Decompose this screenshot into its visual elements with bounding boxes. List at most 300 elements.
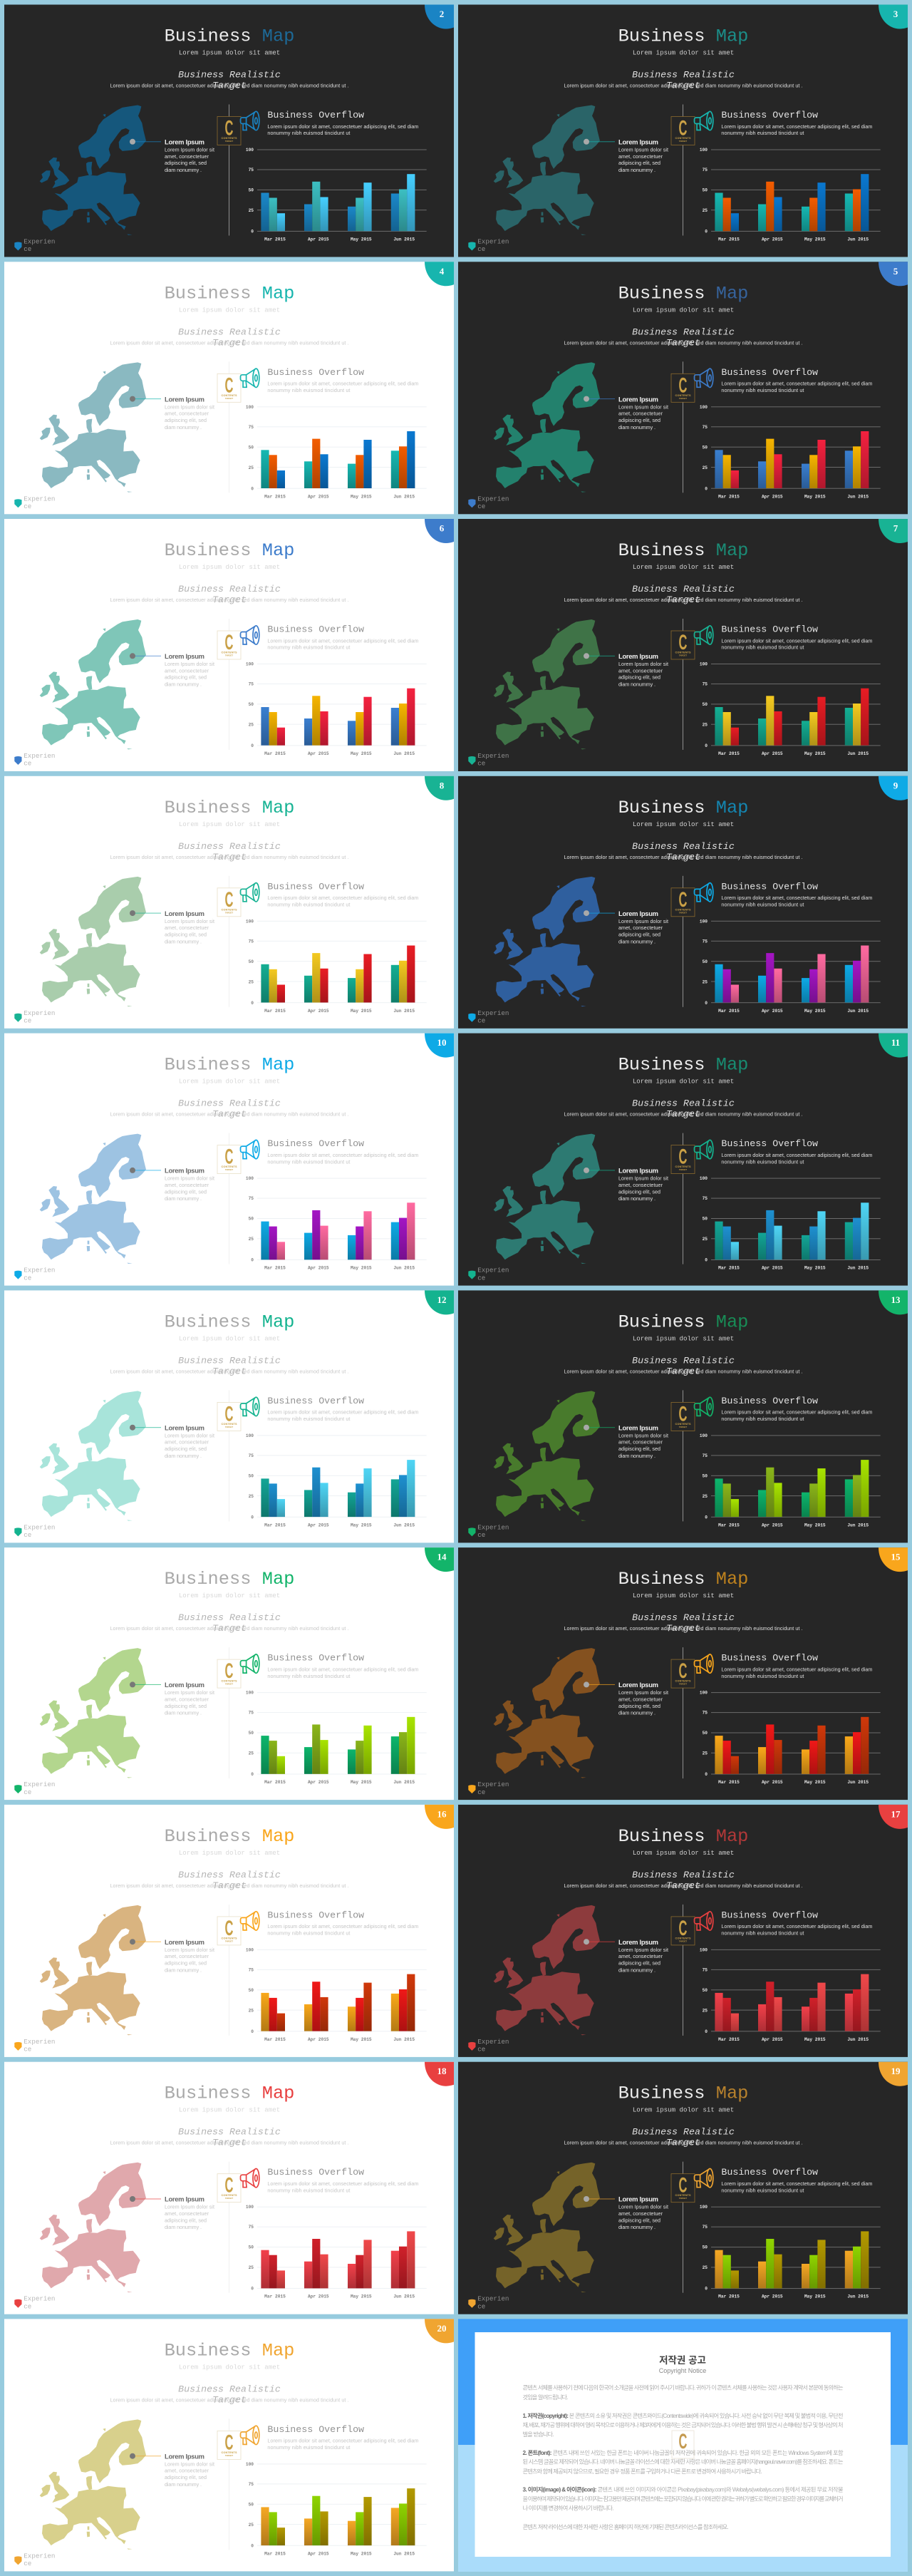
bar chart: 25	[249, 2008, 254, 2013]
map callout: adipiscing elit, sed	[165, 417, 207, 423]
chart heading: nonummy nibh euismod tincidunt ut	[267, 387, 350, 393]
chart heading: Lorem ipsum dolor sit amet, consectetuer adipiscing elit, sed diam	[267, 2180, 418, 2187]
bar chart: May 2015	[804, 494, 826, 499]
footer logo	[14, 2552, 55, 2567]
bar chart: Jun 2015	[393, 1009, 415, 1014]
bar chart	[246, 2462, 427, 2556]
bar chart: 0	[251, 1001, 254, 1006]
title: Business Map	[165, 2083, 294, 2104]
chart heading: nonummy nibh euismod tincidunt ut	[721, 1416, 804, 1422]
section heading: Business Realistic	[632, 70, 735, 80]
bar chart: Jun 2015	[847, 237, 869, 242]
logo badge: CONTENTS	[221, 394, 237, 397]
section heading: Business Realistic	[178, 2127, 281, 2138]
chart heading: Lorem ipsum dolor sit amet, consectetuer adipiscing elit, sed diam	[267, 2438, 418, 2444]
bar chart: Apr 2015	[308, 1266, 329, 1271]
title: Business Map	[165, 1826, 294, 1847]
chart heading: nonummy nibh euismod tincidunt ut	[721, 2187, 804, 2193]
bar chart: 0	[705, 743, 708, 748]
description: Lorem ipsum dolor sit amet, consectetuer adipiscing elit, sed diam nonummy nibh euismod tincidunt ut .	[110, 854, 349, 860]
section heading: Business Realistic	[632, 326, 735, 337]
footer logo	[14, 238, 55, 253]
europe map	[40, 877, 146, 1006]
section heading	[178, 1355, 281, 1376]
logo badge: CONTENTS	[221, 908, 237, 911]
logo badge	[671, 1145, 695, 1174]
bar chart: 50	[249, 2502, 254, 2507]
bar chart: 25	[703, 979, 708, 984]
footer logo: Experien	[477, 1523, 509, 1531]
page number badge	[425, 1805, 454, 1829]
page number badge	[879, 1547, 908, 1572]
subtitle: Lorem ipsum dolor sit amet	[179, 1078, 280, 1086]
bar chart: Apr 2015	[762, 1009, 783, 1014]
map callout	[584, 1681, 668, 1716]
chart heading: Business Overflow	[721, 881, 818, 892]
notice body text: 나 이미지를 변경하여 사용하시기 바랍니다.	[523, 2505, 614, 2512]
map callout: diam nonummy .	[165, 1967, 202, 1973]
logo badge: CONTENTS	[221, 1680, 237, 1683]
map callout: amet, consectetuer	[165, 1182, 209, 1188]
chart heading: Business Overflow	[267, 2424, 364, 2435]
footer logo: Experien	[24, 1523, 55, 1531]
map callout: Lorem Ipsum	[618, 1681, 658, 1689]
bar chart: May 2015	[804, 2037, 826, 2042]
notice body text: 콘텐츠 저작 라이선스에 대한 자세한 사항은 홈페이지 하단에 기재된 콘텐츠라이선스를 참조하세요.	[523, 2523, 728, 2530]
bar chart	[700, 1176, 881, 1271]
bar chart: Mar 2015	[718, 2037, 740, 2042]
page number badge	[425, 1290, 454, 1314]
page number badge: 12	[437, 1294, 446, 1305]
footer logo: ce	[477, 2046, 485, 2054]
chart heading: nonummy nibh euismod tincidunt ut	[267, 902, 350, 908]
map callout: diam nonummy .	[618, 167, 656, 173]
europe map	[40, 1648, 146, 1778]
logo badge	[217, 1145, 241, 1174]
map callout: Lorem Ipsum	[618, 138, 658, 145]
map callout: Lorem Ipsum dolor sit	[165, 918, 214, 924]
panel: slide 13	[458, 1290, 908, 1542]
logo badge: TARGET	[225, 1426, 233, 1428]
bar chart: 100	[246, 2205, 254, 2210]
page number badge: 18	[437, 2066, 447, 2076]
logo badge: C	[679, 2174, 687, 2198]
bar chart: 25	[703, 465, 708, 470]
map callout: Lorem Ipsum dolor sit	[618, 147, 668, 153]
bar chart: Mar 2015	[264, 2294, 286, 2299]
footer logo: Experien	[477, 495, 509, 503]
footer logo: Experien	[24, 1009, 55, 1017]
europe map	[494, 362, 600, 493]
logo badge: TARGET	[225, 1168, 233, 1171]
title: Business Map	[618, 798, 748, 818]
map callout: Lorem Ipsum	[165, 1167, 204, 1175]
map callout: Lorem Ipsum	[165, 395, 204, 403]
bar chart: 25	[703, 1751, 708, 1756]
footer logo: Experien	[477, 238, 509, 245]
map callout	[130, 1681, 214, 1716]
page number badge	[425, 2062, 454, 2086]
notice body text: 것임을 알려드립니다.	[523, 2394, 569, 2401]
logo badge: TARGET	[679, 140, 687, 143]
bar chart: Apr 2015	[308, 1780, 329, 1785]
section heading: Business Realistic	[178, 584, 281, 594]
description: Lorem ipsum dolor sit amet, consectetuer adipiscing elit, sed diam nonummy nibh euismod tincidunt ut .	[110, 597, 349, 603]
panel: slide 14	[4, 1547, 454, 1800]
chart heading: nonummy nibh euismod tincidunt ut	[721, 1673, 804, 1679]
notice body text: 된 시스템 글꼴로 제작되어 있습니다. 네이버 나눔글꼴 라이선스에 대한 자세한 사항은 네이버 나눔글꼴 홈페이지(hangeul.naver.com)를 참조하세요. 폰트는	[523, 2458, 844, 2466]
map callout: adipiscing elit, sed	[165, 1960, 207, 1967]
bar chart: May 2015	[804, 2294, 826, 2299]
subtitle: Lorem ipsum dolor sit amet	[633, 48, 734, 57]
bar chart: 100	[700, 405, 708, 410]
panel: slide 19	[458, 2062, 908, 2314]
section heading: Target	[212, 594, 247, 605]
panel: slide 10	[4, 1034, 454, 1286]
bar chart: 25	[703, 2008, 708, 2013]
logo badge: TARGET	[225, 1683, 233, 1686]
logo badge: TARGET	[225, 911, 233, 914]
page number badge	[879, 1034, 908, 1058]
europe map	[40, 1905, 146, 2035]
footer logo	[468, 1009, 509, 1025]
logo badge: CONTENTS	[675, 394, 691, 397]
map callout: diam nonummy .	[618, 1967, 656, 1973]
footer logo	[468, 495, 509, 510]
panel: slide 11	[458, 1034, 908, 1286]
logo badge	[671, 373, 695, 402]
section heading	[178, 584, 281, 605]
footer logo	[468, 2038, 509, 2054]
map callout: Lorem Ipsum dolor sit	[165, 403, 214, 410]
bar chart: 25	[249, 1494, 254, 1499]
bar chart: 75	[249, 1453, 254, 1458]
logo badge: TARGET	[679, 1939, 687, 1942]
footer logo	[468, 238, 509, 253]
chart heading	[721, 624, 872, 651]
map callout: amet, consectetuer	[165, 2468, 209, 2474]
chart heading: nonummy nibh euismod tincidunt ut	[721, 387, 804, 393]
chart heading: Lorem ipsum dolor sit amet, consectetuer adipiscing elit, sed diam	[721, 2180, 872, 2187]
page number badge: 11	[891, 1037, 900, 1048]
section heading: Target	[666, 852, 700, 862]
map callout	[584, 1167, 668, 1202]
icon: megaphone	[694, 1654, 713, 1673]
page number badge: 7	[893, 523, 898, 533]
map callout	[584, 1423, 668, 1459]
section heading: Business Realistic	[178, 1612, 281, 1623]
bar chart: Mar 2015	[264, 1266, 286, 1271]
logo badge: CONTENTS	[675, 2194, 691, 2197]
chart heading: Business Overflow	[721, 1396, 818, 1406]
footer logo: ce	[477, 760, 485, 768]
description: Lorem ipsum dolor sit amet, consectetuer adipiscing elit, sed diam nonummy nibh euismod tincidunt ut .	[110, 83, 349, 88]
map callout: diam nonummy .	[165, 2481, 202, 2488]
chart heading: Lorem ipsum dolor sit amet, consectetuer adipiscing elit, sed diam	[721, 895, 872, 901]
footer logo: ce	[24, 1788, 31, 1796]
bar chart: 50	[703, 188, 708, 192]
chart heading: Business Overflow	[267, 367, 364, 378]
map callout: amet, consectetuer	[618, 1696, 663, 1702]
logo badge	[671, 888, 695, 917]
bar chart	[700, 661, 881, 756]
europe map	[494, 1391, 600, 1521]
footer logo: Experien	[477, 752, 509, 760]
logo badge: C	[225, 888, 233, 912]
footer logo: Experien	[24, 2552, 55, 2560]
page number badge	[879, 776, 908, 800]
chart heading: Lorem ipsum dolor sit amet, consectetuer adipiscing elit, sed diam	[267, 1666, 418, 1672]
footer logo: Experien	[24, 495, 55, 503]
map callout: amet, consectetuer	[165, 153, 209, 160]
footer logo: ce	[24, 245, 31, 253]
chart heading: nonummy nibh euismod tincidunt ut	[267, 1673, 350, 1679]
section heading	[632, 584, 735, 605]
logo badge: TARGET	[225, 397, 233, 400]
bar chart: Jun 2015	[393, 237, 415, 242]
chart heading: nonummy nibh euismod tincidunt ut	[721, 1158, 804, 1165]
icon: megaphone	[241, 1397, 259, 1416]
logo badge: C	[225, 1402, 233, 1426]
panel: slide 7	[458, 519, 908, 771]
bar chart: 50	[249, 1731, 254, 1736]
bar chart	[246, 148, 427, 242]
bar chart: Jun 2015	[393, 2294, 415, 2299]
footer logo: ce	[24, 503, 31, 510]
bar chart: Mar 2015	[718, 1266, 740, 1271]
bar chart: Mar 2015	[264, 494, 286, 499]
section heading: Business Realistic	[178, 2384, 281, 2394]
subtitle: Lorem ipsum dolor sit amet	[179, 563, 280, 571]
bar chart: 25	[249, 208, 254, 213]
page number badge	[879, 519, 908, 543]
page number badge: 17	[891, 1808, 901, 1819]
page number badge	[425, 2319, 454, 2343]
section heading	[178, 2127, 281, 2148]
bar chart: 75	[249, 168, 254, 172]
notice body text: 콘텐츠 서체를 사용하기 전에 다음의 한국어 소개글을 사전에 읽어 주시기 바랍니다. 귀하가 이 콘텐츠 서체를 사용하는 것은 사용자 계약서 본문에 동의하는	[523, 2384, 844, 2391]
title: Business Map	[165, 2340, 294, 2361]
section heading: Business Realistic	[632, 1355, 735, 1366]
footer logo: ce	[477, 1788, 485, 1796]
logo badge: C	[679, 116, 687, 140]
icon: megaphone	[241, 111, 259, 130]
bar chart: May 2015	[351, 1523, 372, 1527]
section heading: Business Realistic	[632, 841, 735, 852]
chart heading	[267, 1653, 418, 1679]
map callout: adipiscing elit, sed	[165, 1446, 207, 1452]
map callout	[584, 2195, 668, 2230]
map callout: Lorem Ipsum	[618, 395, 658, 403]
bar chart: 75	[249, 1196, 254, 1201]
chart heading	[267, 2167, 418, 2193]
bar chart: 50	[249, 1217, 254, 1222]
bar chart: Jun 2015	[393, 2037, 415, 2042]
notice body text: 3. 이미지(image) & 아이콘(icon): 콘텐츠 내에 쓰인 이미지와 아이콘은 Pixabay(pixabay.com)와 Webalys(webalys.com) 등에서 제공된 무료 저작물	[523, 2486, 844, 2493]
map callout: adipiscing elit, sed	[165, 1703, 207, 1709]
bar chart: 100	[246, 405, 254, 410]
subtitle: Lorem ipsum dolor sit amet	[179, 1334, 280, 1342]
chart heading: Lorem ipsum dolor sit amet, consectetuer adipiscing elit, sed diam	[721, 381, 872, 387]
bar chart: May 2015	[351, 2551, 372, 2556]
panel: slide 4	[4, 262, 454, 514]
chart heading	[721, 1653, 872, 1679]
description: Lorem ipsum dolor sit amet, consectetuer adipiscing elit, sed diam nonummy nibh euismod tincidunt ut .	[110, 2140, 349, 2146]
icon: megaphone	[694, 883, 713, 902]
description: Lorem ipsum dolor sit amet, consectetuer adipiscing elit, sed diam nonummy nibh euismod tincidunt ut .	[110, 1625, 349, 1632]
logo badge: CONTENTS	[675, 1680, 691, 1683]
bar chart: 0	[251, 2543, 254, 2548]
subtitle: Lorem ipsum dolor sit amet	[179, 2106, 280, 2114]
map callout: Lorem Ipsum dolor sit	[618, 661, 668, 667]
subtitle: Lorem ipsum dolor sit amet	[633, 1592, 734, 1599]
bar chart: 75	[249, 681, 254, 687]
map callout: Lorem Ipsum	[618, 2195, 658, 2203]
logo badge: CONTENTS	[675, 137, 691, 140]
map callout: diam nonummy .	[618, 938, 656, 944]
footer logo: Experien	[477, 1781, 509, 1788]
section heading	[178, 1870, 281, 1891]
map callout: Lorem Ipsum dolor sit	[165, 1432, 214, 1438]
map callout: diam nonummy .	[618, 2224, 656, 2230]
map callout: adipiscing elit, sed	[618, 2217, 660, 2223]
page number badge	[425, 4, 454, 29]
bar chart: 75	[703, 168, 708, 172]
logo badge: C	[225, 1145, 233, 1169]
bar chart: 0	[251, 743, 254, 748]
chart heading: Business Overflow	[267, 2167, 364, 2178]
icon: megaphone	[241, 2426, 259, 2445]
map callout: adipiscing elit, sed	[165, 1188, 207, 1195]
chart heading: nonummy nibh euismod tincidunt ut	[267, 2187, 350, 2193]
bar chart: Jun 2015	[847, 751, 869, 756]
bar chart: 0	[251, 1515, 254, 1520]
map callout	[130, 2195, 214, 2230]
bar chart: Jun 2015	[847, 1780, 869, 1785]
icon: megaphone	[241, 369, 259, 388]
footer logo: ce	[477, 1017, 485, 1025]
europe map	[40, 2419, 146, 2550]
logo badge: CONTENTS	[675, 1937, 691, 1939]
footer logo	[468, 2295, 509, 2310]
page number badge	[425, 1034, 454, 1058]
section heading: Target	[212, 1366, 247, 1376]
footer logo: ce	[24, 2302, 31, 2310]
subtitle: Lorem ipsum dolor sit amet	[633, 1334, 734, 1342]
chart heading: Business Overflow	[721, 1653, 818, 1664]
notice body text: 2. 폰트(font): 콘텐츠 내에 쓰인 서있는 한글 폰트는 네이버 나눔글꼴의 저작권에 귀속되어 있습니다. 한글 외의 모든 폰트는 Windows System에 포함	[523, 2449, 844, 2456]
chart heading	[267, 1910, 418, 1937]
bar chart: Apr 2015	[762, 1523, 783, 1527]
title: Business Map	[618, 1826, 748, 1847]
icon: megaphone	[694, 1397, 713, 1416]
chart heading: Business Overflow	[721, 624, 818, 634]
bar chart	[700, 1433, 881, 1527]
logo badge: TARGET	[679, 911, 687, 914]
chart heading	[267, 881, 418, 908]
bar chart	[246, 1947, 427, 2042]
logo badge: TARGET	[679, 1168, 687, 1171]
logo badge	[217, 1917, 241, 1945]
map callout: Lorem Ipsum	[165, 1938, 204, 1946]
page number badge: 13	[891, 1294, 901, 1305]
footer logo	[14, 1523, 55, 1539]
logo badge	[217, 888, 241, 917]
bar chart: May 2015	[351, 751, 372, 756]
footer logo: Experien	[24, 238, 55, 245]
bar chart: 0	[251, 1258, 254, 1263]
section heading	[632, 841, 735, 862]
notice heading: 저작권 공고	[659, 2355, 706, 2366]
bar chart	[246, 2205, 427, 2299]
map callout: amet, consectetuer	[165, 1953, 209, 1959]
bar chart: May 2015	[351, 494, 372, 499]
bar chart: 50	[249, 188, 254, 192]
bar chart: 50	[703, 1217, 708, 1222]
bar chart: May 2015	[804, 237, 826, 242]
subtitle: Lorem ipsum dolor sit amet	[633, 563, 734, 571]
page number badge	[425, 262, 454, 286]
bar chart: Mar 2015	[264, 751, 286, 756]
bar chart: 75	[249, 939, 254, 944]
europe map	[494, 1134, 600, 1264]
bar chart: 100	[700, 2205, 708, 2210]
bar chart: Mar 2015	[264, 2037, 286, 2042]
icon: megaphone	[241, 1140, 259, 1159]
map callout: diam nonummy .	[618, 424, 656, 431]
europe map	[494, 877, 600, 1006]
bar chart: 0	[251, 1772, 254, 1777]
bar chart	[246, 1691, 427, 1785]
map callout	[130, 138, 214, 173]
map callout: amet, consectetuer	[165, 411, 209, 417]
footer logo: Experien	[24, 752, 55, 760]
bar chart: 25	[249, 465, 254, 470]
section heading	[632, 1612, 735, 1634]
section heading	[178, 1612, 281, 1634]
section heading	[178, 841, 281, 862]
chart heading	[721, 110, 872, 136]
bar chart: Jun 2015	[393, 1523, 415, 1527]
bar chart: May 2015	[351, 1266, 372, 1271]
logo badge: CONTENTS	[675, 651, 691, 654]
bar chart: 50	[249, 702, 254, 707]
panel: slide 18	[4, 2062, 454, 2314]
bar chart: May 2015	[804, 751, 826, 756]
bar chart: May 2015	[351, 2037, 372, 2042]
icon: megaphone	[241, 1912, 259, 1930]
chart heading	[267, 367, 418, 393]
map callout: Lorem Ipsum dolor sit	[165, 2204, 214, 2210]
logo badge	[217, 373, 241, 402]
logo badge	[217, 2431, 241, 2459]
bar chart: 0	[251, 2287, 254, 2292]
bar chart: 50	[249, 445, 254, 450]
map callout: amet, consectetuer	[165, 1439, 209, 1446]
map callout: Lorem Ipsum	[165, 1423, 204, 1431]
map callout: adipiscing elit, sed	[165, 932, 207, 938]
bar chart: Mar 2015	[264, 1009, 286, 1014]
title: Business Map	[618, 1055, 748, 1076]
chart heading	[267, 1396, 418, 1422]
logo badge: TARGET	[225, 140, 233, 143]
bar chart: 100	[246, 1433, 254, 1438]
bar chart: Mar 2015	[718, 237, 740, 242]
logo badge: CONTENTS	[221, 1937, 237, 1939]
map callout	[584, 652, 668, 687]
chart heading	[267, 1138, 418, 1165]
map callout: adipiscing elit, sed	[618, 1188, 660, 1195]
